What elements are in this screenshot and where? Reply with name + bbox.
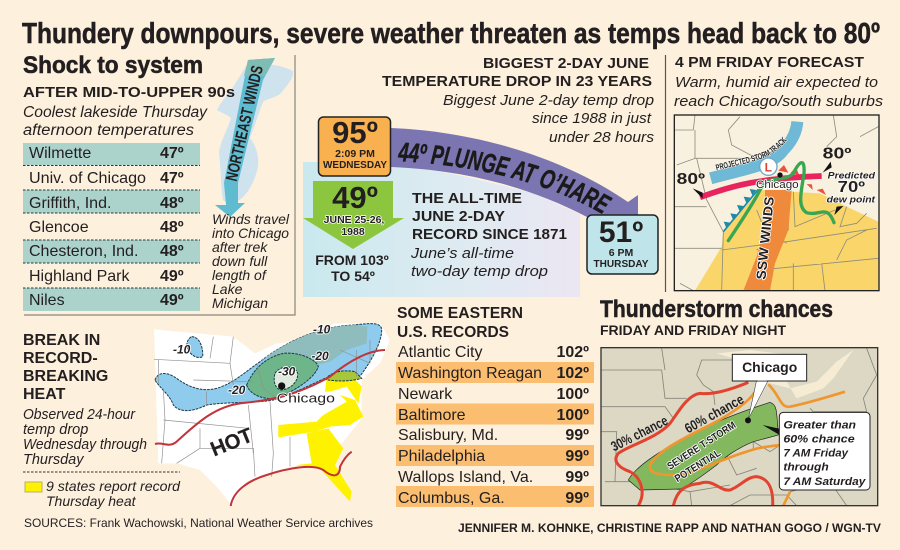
table: records: Washington Reagan bbox=[398, 365, 542, 382]
table: lakeside temperatures: Wilmette bbox=[29, 145, 91, 162]
description bbox=[23, 104, 208, 139]
arrow: SSW winds bbox=[743, 190, 792, 291]
green arrow: 49 degrees record: JUNE 25-26, bbox=[324, 214, 384, 226]
caption: winds travel: Winds travel bbox=[212, 211, 290, 227]
caption: winds travel: down full bbox=[212, 253, 268, 269]
box: 51 degrees: 51º bbox=[599, 216, 643, 249]
heading: biggest drop bbox=[382, 55, 652, 90]
map: forecast bbox=[674, 114, 880, 292]
labels: temperature drop values bbox=[173, 323, 331, 397]
front: cold front teal triangles bbox=[723, 189, 758, 232]
description: since 1988 in just bbox=[532, 110, 652, 127]
table: records: Philadelphia bbox=[398, 448, 485, 465]
heading: break in heat bbox=[23, 332, 108, 403]
table: lakeside temperatures: Highland Park bbox=[29, 268, 130, 285]
label: 80 west: 80º bbox=[677, 171, 705, 188]
table: lakeside temperatures: Chesteron, Ind. bbox=[29, 243, 138, 260]
description: under 28 hours bbox=[549, 129, 655, 146]
callout: Chicago bbox=[732, 354, 807, 423]
text: from 103 to 54 bbox=[315, 252, 389, 284]
panel: thunderstorm chances bbox=[600, 296, 878, 506]
callout: greater than 60 percent: 7 AM Saturday bbox=[783, 476, 866, 488]
text: all-time record: RECORD SINCE 1871 bbox=[412, 226, 567, 243]
label: severe potential: POTENTIAL bbox=[673, 448, 723, 485]
description bbox=[23, 407, 147, 468]
label: predicted dew point: Predicted bbox=[828, 171, 876, 181]
caption: winds travel: into Chicago bbox=[212, 225, 289, 241]
text: from 103 to 54: TO 54º bbox=[331, 268, 375, 284]
map: Lake Michigan with northeast winds arrow: NORTHEAST WINDS bbox=[223, 64, 267, 183]
description: afternoon temperatures bbox=[23, 122, 194, 139]
map: temperature drop bbox=[154, 323, 390, 506]
line: heat boundary north bbox=[155, 350, 385, 445]
description: Warm, humid air expected to bbox=[675, 74, 878, 91]
table: records: Baltimore bbox=[398, 407, 466, 424]
table: lakeside temperatures: 48º bbox=[160, 243, 184, 260]
callout: greater than 60 percent: Greater than bbox=[783, 419, 856, 431]
box: 51 degrees: 6 PM bbox=[609, 247, 634, 259]
callout: greater than 60 percent: 60% chance bbox=[783, 434, 855, 446]
text: all-time record: JUNE 2-DAY bbox=[412, 208, 505, 225]
subheading: FRIDAY AND FRIDAY NIGHT bbox=[600, 323, 787, 338]
box: 95 degrees: 95º bbox=[332, 115, 378, 150]
labels: temperature drop values: -10 bbox=[173, 342, 191, 356]
table: records: Atlantic City bbox=[398, 344, 482, 361]
label: severe potential bbox=[666, 420, 738, 485]
caption: winds travel: Lake bbox=[212, 281, 243, 297]
line: heat boundary south bbox=[231, 452, 352, 506]
label: 30 percent: 30% chance bbox=[608, 412, 670, 454]
description: Coolest lakeside Thursday bbox=[23, 104, 208, 121]
table: records: 102º bbox=[556, 344, 589, 361]
label: HOT: HOT bbox=[207, 424, 256, 461]
line: 60 percent chance bbox=[650, 384, 845, 506]
text: all-time record bbox=[410, 190, 567, 280]
table: lakeside temperatures: 49º bbox=[160, 268, 184, 285]
box: 95 degrees: WEDNESDAY bbox=[323, 160, 387, 171]
text: all-time record: June’s all-time bbox=[410, 245, 514, 262]
table: lakeside temperatures: Glencoe bbox=[29, 219, 89, 236]
table: records: Columbus, Ga. bbox=[398, 490, 505, 507]
green arrow: 49 degrees record bbox=[303, 180, 404, 249]
description: temp drop bbox=[23, 422, 88, 438]
labels: temperature drop values: -10 bbox=[313, 323, 331, 337]
legend: record heat: 9 states report record bbox=[46, 478, 181, 494]
table: lakeside temperatures: 47º bbox=[160, 145, 184, 162]
table: records: 99º bbox=[565, 469, 589, 486]
yellow: record heat states bbox=[278, 378, 363, 502]
sources: SOURCES: Frank Wachowski, National Weather Service archives bbox=[24, 516, 373, 530]
table: lakeside temperatures bbox=[23, 143, 200, 311]
arc arrow: plunge: 44º PLUNGE AT O’HARE bbox=[398, 142, 613, 214]
caption: winds travel: Michigan bbox=[212, 295, 268, 311]
label: Chicago: Chicago bbox=[756, 179, 799, 191]
table: records: 102º bbox=[556, 365, 589, 382]
caption: winds travel: after trek bbox=[212, 239, 268, 255]
heading: records bbox=[397, 305, 523, 341]
description: Thursday bbox=[23, 452, 84, 468]
label: 80 east: 80º bbox=[823, 145, 852, 162]
table: records: 100º bbox=[556, 386, 589, 403]
description: reach Chicago/south suburbs bbox=[674, 93, 884, 110]
table: lakeside temperatures: Griffith, Ind. bbox=[29, 195, 111, 212]
label: Chicago: Chicago bbox=[277, 391, 335, 406]
description bbox=[443, 92, 655, 146]
box: 51 degrees: THURSDAY bbox=[594, 258, 648, 270]
table: records bbox=[396, 344, 594, 507]
table: records: Newark bbox=[398, 386, 453, 403]
arrow: SSW winds: SSW WINDS bbox=[753, 196, 777, 280]
line: 70 degree dew point bbox=[728, 163, 834, 241]
table: records: 99º bbox=[565, 490, 589, 507]
panel: eastern records bbox=[396, 305, 594, 507]
labels: temperature drop values: -20 bbox=[228, 383, 246, 397]
overlap: record heat in drop zone bbox=[325, 371, 362, 381]
description: Wednesday through bbox=[23, 437, 147, 453]
label: predicted dew point bbox=[827, 171, 876, 215]
box: 95 degrees: 2:09 PM bbox=[335, 148, 375, 160]
subheading: AFTER MID-TO-UPPER 90s bbox=[23, 85, 235, 101]
green arrow: 49 degrees record: 1988 bbox=[341, 226, 365, 238]
table: lakeside temperatures: 48º bbox=[160, 219, 184, 236]
table: lakeside temperatures: 49º bbox=[160, 292, 184, 309]
front: warm front red triangles bbox=[778, 165, 826, 195]
area: severe potential bbox=[628, 402, 778, 490]
box: 51 degrees bbox=[587, 215, 658, 274]
description bbox=[674, 74, 884, 110]
green arrow: 49 degrees record: 49º bbox=[332, 180, 378, 215]
heading: break in heat: BREAK IN bbox=[23, 332, 100, 349]
description: Observed 24-hour bbox=[23, 407, 136, 423]
table: lakeside temperatures: Univ. of Chicago bbox=[29, 170, 146, 187]
legend: record heat bbox=[25, 478, 181, 509]
box: 95 degrees bbox=[318, 115, 390, 176]
label: predicted dew point: dew point bbox=[827, 195, 876, 205]
band: storm track: PROJECTED STORM TRACK bbox=[715, 136, 788, 171]
label: 60 percent: 60% chance bbox=[682, 391, 746, 436]
panel: biggest temperature drop bbox=[303, 55, 659, 297]
heading: biggest drop: TEMPERATURE DROP IN 23 YEARS bbox=[382, 73, 652, 90]
heading: thunderstorm chances: Thunderstorm chances bbox=[600, 296, 833, 323]
table: records: 99º bbox=[565, 448, 589, 465]
text: all-time record: THE ALL-TIME bbox=[412, 190, 522, 207]
heading: break in heat: HEAT bbox=[23, 386, 66, 403]
text: all-time record: two-day temp drop bbox=[411, 263, 548, 280]
text: from 103 to 54: FROM 103º bbox=[315, 252, 389, 268]
labels: temperature drop values: -30 bbox=[278, 364, 296, 378]
label: 80 west bbox=[677, 171, 705, 198]
callout: Chicago: Chicago bbox=[742, 359, 797, 375]
table: records: 99º bbox=[565, 427, 589, 444]
labels: temperature drop values: -20 bbox=[311, 349, 329, 363]
credit: JENNIFER M. KOHNKE, CHRISTINE RAPP AND NATHAN GOGO / WGN-TV bbox=[458, 523, 881, 535]
description: Biggest June 2-day temp drop bbox=[443, 92, 654, 109]
background panel bbox=[303, 162, 580, 297]
line: 30 percent chance bbox=[616, 382, 773, 506]
heading: break in heat: RECORD- bbox=[23, 350, 98, 367]
heading: shock to system: Shock to system bbox=[23, 52, 203, 79]
heading: records: SOME EASTERN bbox=[397, 305, 523, 322]
caption: winds travel: length of bbox=[212, 267, 268, 283]
panel: break in record-breaking heat bbox=[23, 323, 390, 530]
region: minus 30 drop bbox=[274, 367, 298, 390]
callout: greater than 60 percent: through bbox=[783, 462, 829, 474]
legend: record heat: Thursday heat bbox=[46, 493, 137, 509]
line: 80 degree isotherm bbox=[700, 176, 822, 197]
label: 80 east bbox=[823, 145, 852, 173]
table: lakeside temperatures: 47º bbox=[160, 170, 184, 187]
heading: biggest drop: BIGGEST 2-DAY JUNE bbox=[483, 55, 649, 72]
table: lakeside temperatures: 48º bbox=[160, 195, 184, 212]
callout: greater than 60 percent: 7 AM Friday bbox=[783, 448, 849, 460]
panel: 4 PM Friday forecast bbox=[674, 54, 884, 292]
table: records: Wallops Island, Va. bbox=[398, 469, 533, 486]
band: storm track bbox=[709, 121, 804, 184]
heading: break in heat: BREAKING bbox=[23, 368, 108, 385]
table: lakeside temperatures: Niles bbox=[29, 292, 65, 309]
table: records: 100º bbox=[556, 407, 589, 424]
region: minus 10 drop bbox=[155, 324, 382, 411]
map: Lake Michigan with northeast winds arrow bbox=[215, 58, 293, 217]
panel: shock to system bbox=[23, 52, 295, 315]
heading: records: U.S. RECORDS bbox=[397, 324, 509, 341]
callout: greater than 60 percent bbox=[763, 412, 870, 490]
heading: forecast: 4 PM FRIDAY FORECAST bbox=[675, 54, 864, 71]
table: records: Salisbury, Md. bbox=[398, 427, 498, 444]
icon: low pressure: L bbox=[765, 160, 772, 174]
icon: low pressure bbox=[760, 158, 777, 175]
label: predicted dew point: 70º bbox=[838, 179, 865, 196]
region: minus 20 drop bbox=[247, 353, 318, 399]
caption: winds travel bbox=[212, 211, 290, 311]
map: storm chances bbox=[601, 348, 878, 506]
label: severe potential: SEVERE T-STORM bbox=[666, 420, 738, 473]
